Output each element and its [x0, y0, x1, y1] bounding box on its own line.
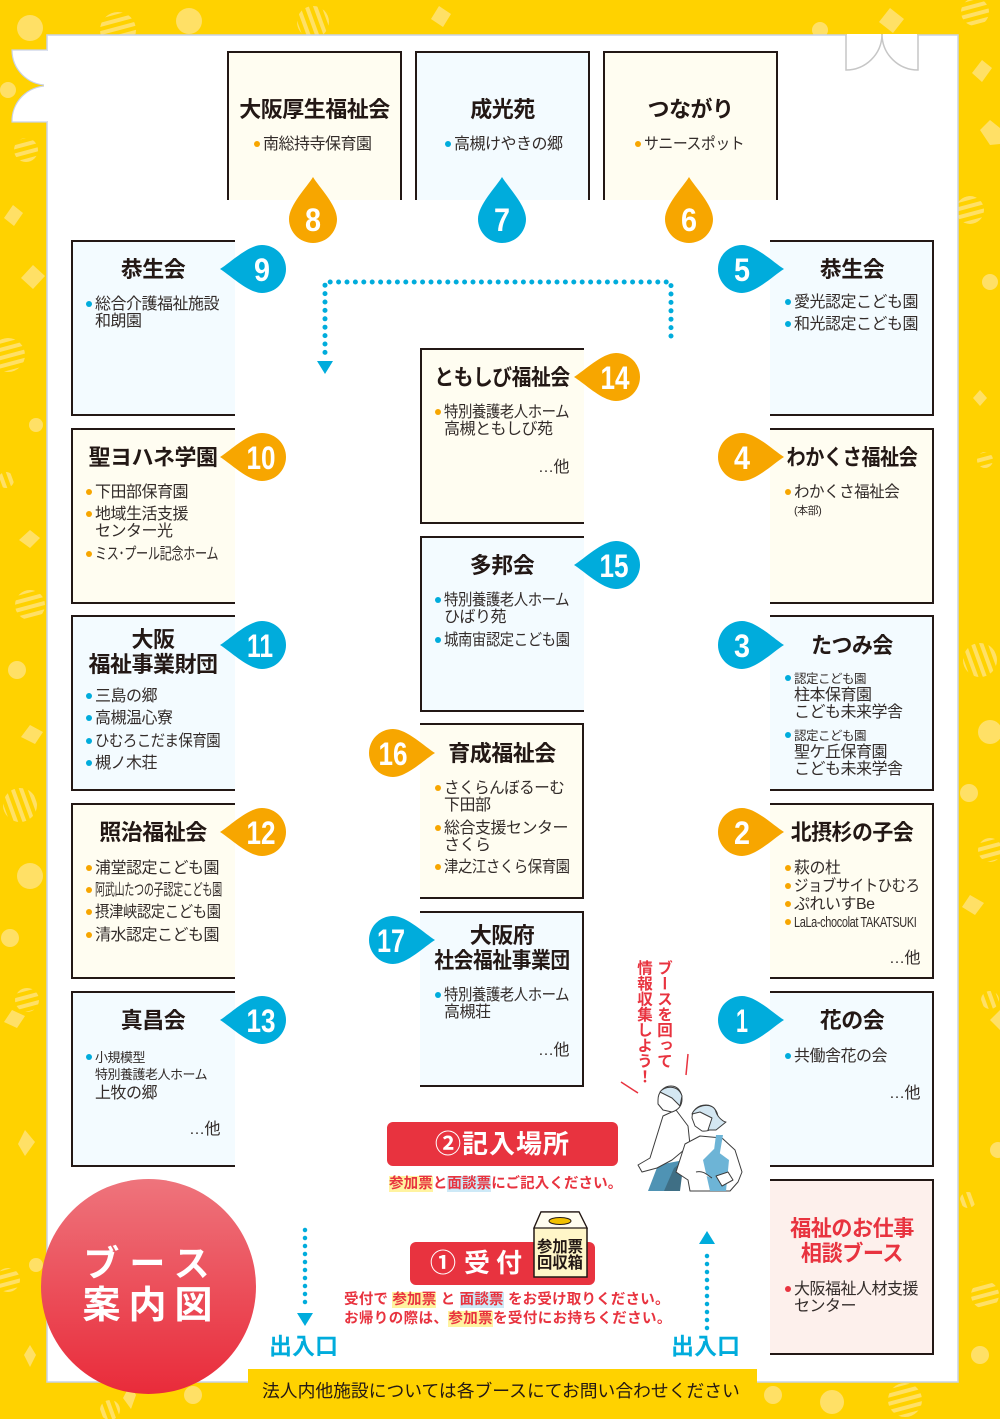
marker 13: 13	[246, 1003, 276, 1039]
callout: vertical message: 情報収集しよう！	[635, 960, 652, 1084]
marker 4: 4	[734, 440, 750, 476]
panel: 大阪福祉事業財団 booth 11	[71, 615, 235, 791]
panel: 恭生会 booth 9	[71, 240, 235, 416]
panel: ともしび福祉会 booth 14	[420, 348, 584, 524]
marker 14: 14	[600, 360, 630, 396]
others note: …他	[538, 459, 569, 476]
list item: 特別養護老人ホーム	[444, 404, 569, 421]
list item continuation: 和朗園	[95, 313, 142, 330]
list item: 浦堂認定こども園	[95, 860, 219, 877]
list item: 小規模型	[95, 1050, 145, 1065]
badge title line two: 案内図	[82, 1285, 220, 1327]
panel: 成光苑 booth 7	[415, 51, 590, 200]
list item continuation: さくら	[444, 837, 491, 854]
icon: ticket collection box: 回収箱	[537, 1253, 583, 1272]
heading: 恭生会	[121, 257, 185, 282]
marker 1	[718, 996, 784, 1044]
list item category: 認定こども園	[794, 729, 866, 743]
heading: 多邦会	[470, 553, 534, 578]
marker 2: 2	[734, 815, 750, 851]
heading: ともしび福祉会	[434, 365, 570, 390]
list item: 高槻けやきの郷	[454, 136, 563, 153]
marker 15	[574, 541, 640, 589]
arrow: entrance up on the right	[699, 1231, 715, 1328]
heading: わかくさ福祉会	[787, 445, 917, 470]
list item continuation: センター光	[95, 523, 173, 540]
list item: 地域生活支援	[95, 506, 188, 523]
marker 11	[220, 621, 286, 669]
button: ①受付: 付	[496, 1248, 522, 1278]
list item continuation: 高槻荘	[444, 1004, 491, 1021]
button: ①受付	[410, 1242, 595, 1285]
list item: 下田部保育園	[95, 484, 188, 501]
button: ①受付: ①	[430, 1248, 456, 1278]
others note: …他	[889, 950, 920, 967]
list item: ぷれいすBe	[794, 896, 875, 913]
icon: ticket collection box: 参加票	[537, 1238, 583, 1256]
callout: vertical message: ブースを回って	[655, 960, 672, 1068]
panel: 福祉のお仕事相談ブース	[770, 1179, 934, 1355]
list item: LaLa-chocolat TAKATSUKI	[794, 914, 916, 931]
marker 1: 1	[736, 1003, 748, 1039]
panel: たつみ会 booth 3	[770, 615, 934, 791]
button: ①受付: 受	[464, 1248, 490, 1278]
heading: 聖ヨハネ学園	[88, 445, 218, 470]
list item: さくらんぼるーむ	[444, 780, 564, 797]
panel: 花の会 booth 1	[770, 991, 934, 1167]
heading: 福祉のお仕事	[790, 1216, 914, 1241]
badge: ブース案内図	[41, 1179, 256, 1394]
marker 16	[369, 729, 435, 777]
list item: 萩の杜	[794, 860, 841, 877]
panel: 多邦会 booth 15	[420, 536, 584, 712]
marker 8	[289, 177, 337, 243]
list item continuation: 下田部	[444, 797, 491, 814]
marker 9: 9	[254, 252, 270, 288]
footer band	[248, 1369, 757, 1413]
panel: 大阪府社会福祉事業団 booth 17	[420, 911, 584, 1087]
marker 6	[665, 177, 713, 243]
marker 10	[220, 433, 286, 481]
list item: 特別養護老人ホーム	[444, 592, 569, 609]
heading: たつみ会	[811, 633, 893, 658]
list item: 総合支援センター	[444, 820, 568, 837]
label: left entrance: 出入口	[269, 1333, 338, 1359]
marker 12	[220, 808, 286, 856]
list item: 城南宙認定こども園	[444, 632, 570, 649]
marker 7: 7	[494, 202, 510, 238]
marker 7	[478, 177, 526, 243]
list item: 三島の郷	[95, 688, 157, 705]
callout: vertical message	[635, 960, 672, 1084]
marker 6: 6	[681, 202, 697, 238]
note: reception instructions: 受付で 参加票 と 面談票 をお受け取りください。	[344, 1292, 670, 1308]
marker 3	[718, 621, 784, 669]
list item: 愛光認定こども園	[794, 294, 918, 311]
marker 16: 16	[378, 736, 408, 772]
list item: 共働舎花の会	[794, 1048, 887, 1065]
list item line three: 上牧の郷	[95, 1085, 157, 1102]
heading: 花の会	[820, 1008, 884, 1033]
marker 9	[220, 245, 286, 293]
panel: 大阪厚生福祉会 booth 8	[227, 51, 402, 200]
marker 5	[718, 245, 784, 293]
button: ②記入場所: ②記入場所	[435, 1129, 570, 1159]
note: writing area instructions: 参加票と面談票にご記入ください。	[389, 1176, 622, 1192]
badge title line one: ブース	[83, 1243, 220, 1284]
marker 5: 5	[734, 252, 750, 288]
list item: 総合介護福祉施設	[95, 296, 219, 313]
list item: 大阪福祉人材支援	[794, 1281, 918, 1298]
heading: 成光苑	[470, 97, 535, 122]
heading line two: 相談ブース	[801, 1241, 903, 1266]
list item: 槻ノ木荘	[95, 755, 157, 772]
list item: 高槻温心寮	[95, 710, 173, 727]
list item: こども未来学舎	[794, 704, 903, 721]
heading: 育成福祉会	[448, 741, 556, 766]
button: ②記入場所	[387, 1122, 618, 1166]
heading line two: 社会福祉事業団	[434, 948, 570, 973]
list item: ひむろこだま保育園	[95, 733, 220, 750]
panel: つながり booth 6	[603, 51, 778, 200]
heading: 照治福祉会	[99, 820, 207, 845]
marker 10: 10	[246, 440, 276, 476]
heading line two: 福祉事業財団	[88, 652, 218, 677]
arrow: exit down on the left	[297, 1230, 313, 1326]
list item: こども未来学舎	[794, 761, 903, 778]
heading: 北摂杉の子会	[791, 820, 913, 845]
list item: ミス･プール記念ホーム	[95, 546, 218, 563]
list item: 南総持寺保育園	[263, 136, 372, 153]
list item: 摂津峡認定こども園	[95, 904, 221, 921]
heading: つながり	[647, 97, 734, 122]
list item: 清水認定こども園	[95, 927, 219, 944]
marker 11: 11	[247, 628, 273, 664]
heading: 真昌会	[121, 1008, 185, 1033]
marker 8: 8	[305, 202, 321, 238]
list item: わかくさ福祉会	[794, 484, 899, 501]
list item category: 認定こども園	[794, 672, 866, 686]
panel: 聖ヨハネ学園 booth 10	[71, 428, 235, 604]
others note: …他	[538, 1042, 569, 1059]
list item: 聖ケ丘保育園	[794, 744, 887, 761]
list item line two: 特別養護老人ホーム	[95, 1067, 207, 1082]
heading: 恭生会	[820, 257, 884, 282]
marker 14	[574, 353, 640, 401]
marker 15: 15	[600, 548, 628, 584]
others note: …他	[889, 1085, 920, 1102]
marker 3: 3	[734, 628, 750, 664]
note: return instructions: お帰りの際は、参加票を受付にお持ちください。	[344, 1311, 672, 1327]
marker 4	[718, 433, 784, 481]
marker 17: 17	[377, 923, 405, 959]
others note: …他	[189, 1121, 220, 1138]
panel: 照治福祉会 booth 12	[71, 803, 235, 979]
list item: 和光認定こども園	[794, 316, 918, 333]
list item: 阿武山たつの子認定こども園	[95, 882, 222, 899]
list item: 柱本保育園	[794, 687, 872, 704]
panel: 恭生会 booth 5	[770, 240, 934, 416]
icon: ticket collection box	[533, 1211, 588, 1278]
list item continuation: 高槻ともしび苑	[444, 421, 553, 438]
panel: 北摂杉の子会 booth 2	[770, 803, 934, 979]
panel: わかくさ福祉会 booth 4	[770, 428, 934, 604]
panel: 真昌会 booth 13	[71, 991, 235, 1167]
list item: ジョブサイトひむろ	[794, 878, 920, 895]
heading: 大阪府	[470, 923, 534, 948]
list item note: (本部)	[794, 505, 821, 517]
marker 13	[220, 996, 286, 1044]
list item continuation: ひばり苑	[444, 609, 506, 626]
heading: 大阪厚生福祉会	[239, 97, 390, 122]
label: right entrance: 出入口	[671, 1333, 740, 1359]
marker 2	[718, 808, 784, 856]
marker 17	[369, 916, 435, 964]
list item: 津之江さくら保育園	[444, 859, 570, 876]
list item continuation: センター	[794, 1298, 856, 1315]
footer text: 法人内他施設については各ブースにてお問い合わせください	[262, 1381, 740, 1401]
list item: サニースポット	[644, 136, 744, 153]
panel: 育成福祉会 booth 16	[420, 723, 584, 899]
marker 12: 12	[246, 815, 276, 851]
heading: 大阪	[131, 627, 174, 652]
arrow: route across the hall	[317, 282, 671, 374]
list item: 特別養護老人ホーム	[444, 987, 569, 1004]
